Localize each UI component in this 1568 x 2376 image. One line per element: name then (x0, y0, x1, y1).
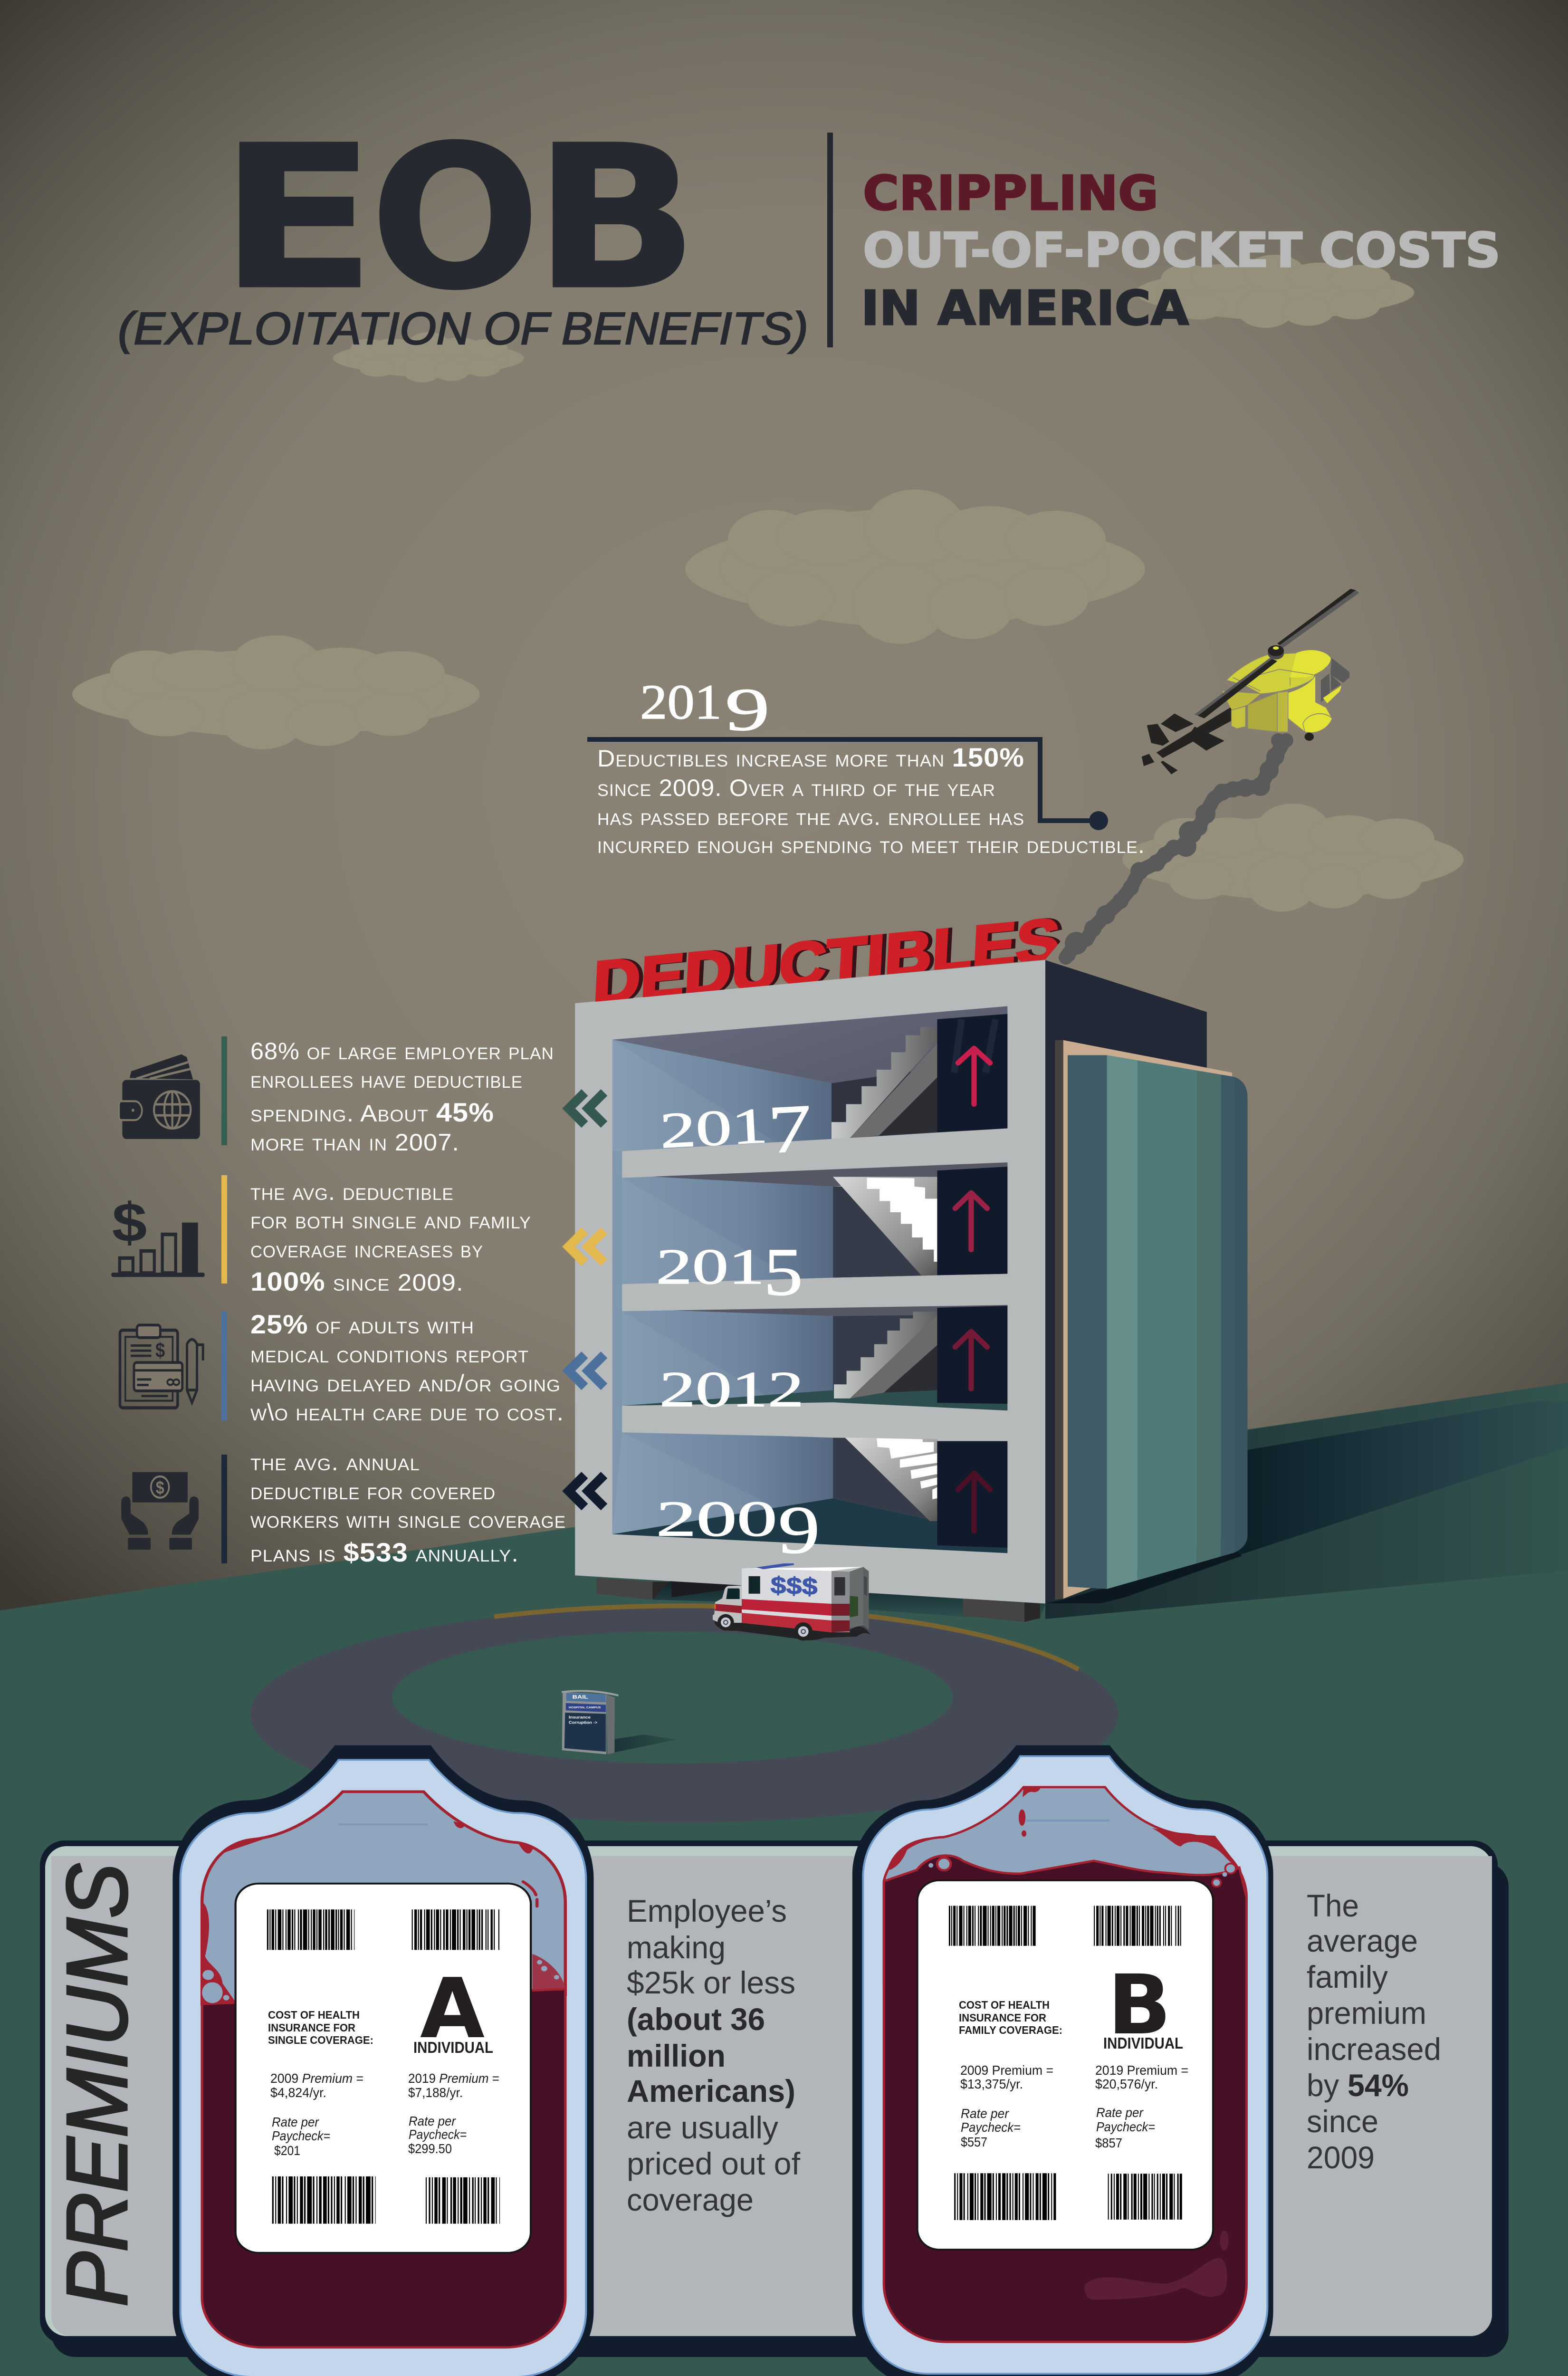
text: annual deductible: the avg. annual (250, 1449, 420, 1475)
premiums and rates B: Paycheck= (961, 2120, 1021, 2135)
cloud: large center (685, 489, 1145, 644)
text: employees priced out: million (627, 2038, 726, 2073)
label heading A: SINGLE COVERAGE: (268, 2034, 373, 2046)
year 2015: 201 (656, 1238, 765, 1294)
label heading B: COST OF HEALTH (959, 1999, 1050, 2011)
floor 2015 (612, 1161, 1010, 1284)
bar: navy (221, 1455, 227, 1563)
icon: hands holding money (121, 1472, 199, 1550)
year label 2019: 201 (640, 675, 722, 729)
floor 2012 (612, 1304, 1008, 1410)
teal curtain (1068, 1048, 1249, 1596)
helicopter (1142, 589, 1359, 775)
chevron: yellow (569, 1231, 604, 1263)
right column cover (1007, 1000, 1045, 1601)
text: average deductible: 100% since 2009. (250, 1266, 464, 1296)
text: family premium increase: family (1307, 1959, 1388, 1994)
year 2017: 7 (766, 1090, 814, 1168)
premiums and rates B: $20,576/yr. (1095, 2077, 1158, 2091)
premiums and rates A: Rate per (272, 2115, 320, 2129)
icon: hands holding money: $ (156, 1478, 164, 1498)
bar: yellow (221, 1175, 227, 1284)
premiums and rates A: Paycheck= (272, 2128, 330, 2143)
premiums and rates A: Rate per (409, 2114, 457, 2128)
left wall inner edge (612, 1040, 623, 1534)
cloud: small behind subtitle (333, 332, 524, 383)
premiums and rates B: $857 (1095, 2136, 1122, 2150)
text: annual deductible: workers with single coverage (250, 1506, 566, 1533)
label heading B (959, 1999, 1062, 2036)
blood bag B (852, 1745, 1273, 2376)
letter A: A (420, 1961, 485, 2057)
sign: bail hospital campus: Insurance (569, 1715, 591, 1720)
premiums and rates A: 2019 Premium = (408, 2071, 499, 2086)
title: EOB: E (219, 104, 376, 334)
icon: dollar bar chart (111, 1192, 205, 1277)
building footing blocks (596, 1578, 1045, 1622)
premiums and rates B (960, 2063, 1188, 2150)
text: average deductible: for both single and family (250, 1207, 531, 1234)
text: family premium increase: 2009 (1307, 2140, 1375, 2175)
tan panel (1055, 1040, 1232, 1600)
icon: wallet (119, 1054, 200, 1139)
sign: bail hospital campus: Corruption -> (569, 1721, 597, 1725)
label heading B: FAMILY COVERAGE: (959, 2024, 1062, 2036)
text: delayed care: having delayed and/or going (250, 1370, 561, 1397)
blood bag A (172, 1745, 593, 2376)
text: annual deductible: deductible for covered (250, 1478, 496, 1504)
text: family premium increase: since (1307, 2104, 1378, 2139)
text: large employer enrollees: enrollees have deductible (250, 1066, 523, 1093)
text: annual deductible: plans is $533 annually. (250, 1537, 519, 1567)
label card A (236, 1884, 531, 2253)
text: family premium increase: premium (1307, 1995, 1426, 2031)
text: large employer enrollees (250, 1038, 554, 1156)
label card B (918, 1880, 1213, 2250)
text: average deductible: the avg. deductible (250, 1178, 454, 1205)
callout: 2019 (587, 675, 1145, 858)
premiums and rates A: $299.50 (408, 2141, 452, 2156)
year 2009 (656, 1491, 820, 1567)
label heading A: INSURANCE FOR (268, 2022, 355, 2034)
year 2015 (656, 1234, 803, 1309)
ambulance (713, 1563, 870, 1641)
cloud: behind costs heading (1135, 255, 1415, 328)
text: family premium increase: average (1307, 1923, 1418, 1958)
title: EOB (219, 104, 698, 334)
text: average deductible (250, 1178, 531, 1296)
text: employees priced out: priced out of (627, 2146, 801, 2181)
year 2015: 5 (764, 1234, 803, 1309)
chevron: green (569, 1092, 604, 1124)
building (575, 960, 1249, 1622)
text: annual deductible (250, 1449, 566, 1567)
premiums and rates B: $557 (961, 2135, 987, 2149)
roof sign: deductibles: DEDUCTIBLES (592, 906, 1061, 1017)
callout connector with dot (587, 739, 1108, 830)
premiums and rates B: $13,375/yr. (960, 2077, 1023, 2091)
stat block: wallet (119, 1036, 554, 1156)
text: employees priced out: (about 36 (627, 2002, 765, 2037)
text: employees priced out (627, 1893, 801, 2217)
premiums and rates A: $4,824/yr. (270, 2085, 326, 2100)
heading: crippling: CRIPPLING (863, 165, 1158, 221)
callout text: has passed before the avg. enrollee has (597, 804, 1024, 830)
stat block: hands with money (121, 1449, 566, 1567)
text: family premium increase: by 54% (1307, 2068, 1409, 2103)
premiums and rates B: Rate per (961, 2106, 1010, 2121)
text: average deductible: coverage increases by (250, 1236, 483, 1263)
premiums and rates A: Paycheck= (409, 2127, 467, 2142)
premiums and rates A (270, 2071, 499, 2158)
sky background (0, 0, 1568, 1663)
premiums and rates A: $7,188/yr. (408, 2085, 463, 2100)
individual tag A: INDIVIDUAL (413, 2039, 493, 2056)
premiums and rates B: 2009 Premium = (960, 2063, 1053, 2078)
text: large employer enrollees: more than in 2007. (250, 1129, 459, 1156)
text: employees priced out: Americans) (627, 2073, 795, 2108)
premiums and rates B: Rate per (1096, 2105, 1144, 2120)
heading: out-of-pocket costs: OUT-OF-POCKET COSTS (863, 222, 1501, 278)
text: family premium increase (1307, 1888, 1441, 2175)
bar: blue (221, 1312, 227, 1420)
smoke trail (1062, 733, 1293, 962)
title divider (827, 133, 833, 347)
year 2009: 9 (778, 1492, 820, 1567)
text: large employer enrollees: spending. About 45% (250, 1097, 494, 1127)
year 2017: 201 (659, 1097, 769, 1159)
heading: premiums: PREMIUMS (49, 1863, 145, 2307)
ground (0, 1383, 1568, 2376)
text: delayed care: w\o health care due to cost. (250, 1399, 564, 1426)
sign: bail hospital campus: HOSPITAL CAMPUS (569, 1706, 601, 1709)
cloud: left (72, 635, 480, 749)
text: employees priced out: making (627, 1930, 726, 1965)
text: employees priced out: coverage (627, 2182, 754, 2217)
roof sign: deductibles: DEDUCTIBLES (595, 906, 1065, 1017)
stat block: bar chart (111, 1175, 531, 1296)
letter B: B (1108, 1957, 1171, 2053)
text: employees priced out: are usually (627, 2110, 778, 2145)
bag shape A (172, 1745, 593, 2376)
text: delayed care (250, 1309, 564, 1426)
year 2012: 2012 (660, 1361, 804, 1417)
sign: bail hospital campus (562, 1690, 677, 1754)
bar: green (221, 1036, 227, 1145)
floor slabs (622, 1127, 1045, 1441)
callout text: Deductibles increase more than 150% (597, 742, 1024, 772)
sign: bail hospital campus: BAIL (573, 1694, 588, 1700)
year 2009: 200 (656, 1491, 777, 1547)
year 2017 (658, 1090, 814, 1173)
text: family premium increase: The (1307, 1888, 1359, 1923)
floor 2009 (612, 1430, 1007, 1553)
building side wall (1045, 960, 1207, 1603)
premiums and rates B: Paycheck= (1096, 2119, 1155, 2134)
stat block: clipboard (120, 1309, 564, 1426)
label heading A (268, 2009, 373, 2046)
title: EOB: O (370, 104, 540, 334)
premiums and rates A: $201 (274, 2143, 300, 2158)
building cast shadow (1045, 1383, 1568, 1619)
callout text (597, 742, 1145, 858)
premiums and rates A: 2009 Premium = (270, 2071, 363, 2086)
label heading A: COST OF HEALTH (268, 2009, 360, 2021)
icon: dollar bar chart: $ (112, 1192, 147, 1253)
text: employees priced out: Employee’s (627, 1893, 787, 1928)
bag shape B (852, 1745, 1273, 2376)
icon: clipboard with card and pen (120, 1325, 203, 1408)
callout text: since 2009. Over a third of the year (597, 775, 995, 801)
icon: clipboard with card and pen: $ (155, 1340, 165, 1362)
year label 2019: 9 (725, 676, 770, 743)
road ring (250, 1606, 1118, 1822)
chevron: blue (569, 1355, 604, 1387)
title: EOB: B (534, 104, 698, 334)
callout text: incurred enough spending to meet their deductible. (597, 832, 1145, 858)
panel: premiums (40, 1840, 1509, 2357)
title block (118, 104, 1501, 354)
year label 2019 (640, 675, 770, 743)
heading: in america: IN AMERICA (861, 280, 1189, 336)
premiums and rates B: 2019 Premium = (1095, 2063, 1188, 2078)
text: large employer enrollees: 68% of large employer plan (250, 1038, 554, 1064)
individual tag B: INDIVIDUAL (1103, 2034, 1183, 2052)
text: employees priced out: $25k or less (627, 1965, 795, 2000)
text: delayed care: medical conditions report (250, 1341, 529, 1368)
chevron: navy (569, 1475, 604, 1507)
ambulance: $$$ (770, 1572, 818, 1600)
building front frame (575, 960, 1045, 1603)
cloud: right near helicopter (1122, 804, 1463, 911)
text: delayed care: 25% of adults with (250, 1309, 474, 1339)
subtitle: exploitation of benefits: (EXPLOITATION OF BENEFITS) (118, 303, 808, 354)
text: family premium increase: increased (1307, 2031, 1441, 2067)
floor 2017 (612, 1006, 1007, 1151)
label heading B: INSURANCE FOR (959, 2012, 1046, 2024)
